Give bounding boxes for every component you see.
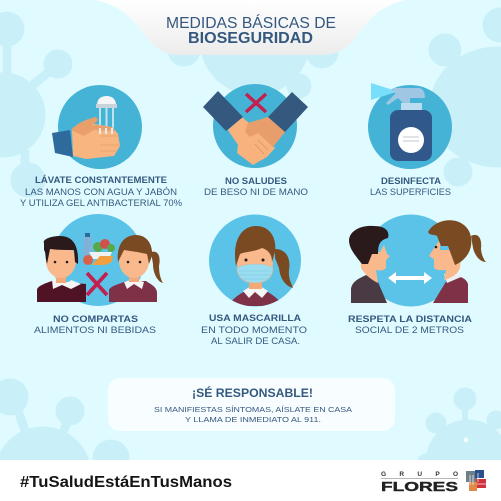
- panel: respeta la distancia: [348, 214, 486, 335]
- panel: usa mascarilla: [201, 214, 307, 346]
- arrow: double headed: [388, 272, 432, 284]
- icon: hand washing: [52, 85, 142, 169]
- title line 1: MEDIDAS BÁSICAS DE: [166, 13, 336, 32]
- text: lávate: [20, 174, 182, 208]
- man profile: [349, 226, 390, 303]
- text: lávate: LAS MANOS CON AGUA Y JABÓN: [25, 187, 177, 197]
- logo: grupo flores: GRUPO: [381, 471, 458, 478]
- icon: two people and food crossed: [37, 214, 163, 306]
- text: desinfecta: LAS SUPERFICIES: [370, 187, 451, 197]
- callout: sé responsable: [108, 378, 395, 431]
- logo: grupo flores: FLORES: [381, 479, 458, 494]
- woman profile: [428, 220, 486, 303]
- icon: handshake crossed: [203, 84, 308, 168]
- text: usa mascarilla: AL SALIR DE CASA.: [211, 336, 300, 346]
- text: no compartas: NO COMPARTAS: [53, 314, 138, 324]
- virus highlight dot: [464, 438, 468, 442]
- text: no saludes: DE BESO NI DE MANO: [204, 187, 308, 197]
- icon: woman with mask: [209, 214, 301, 306]
- callout heading: ¡SÉ RESPONSABLE!: [192, 385, 313, 400]
- callout text: SI MANIFIESTAS SÍNTOMAS, AÍSLATE EN CASA: [154, 405, 353, 414]
- panel: lávate las manos: [20, 85, 182, 208]
- text: no saludes: [204, 176, 308, 197]
- text: respeta: RESPETA LA DISTANCIA: [348, 314, 472, 324]
- text: no saludes: NO SALUDES: [225, 176, 287, 186]
- text: lávate: LÁVATE CONSTANTEMENTE: [35, 174, 167, 185]
- callout text: Y LLAMA DE INMEDIATO AL 911.: [185, 415, 321, 424]
- callout text: [154, 405, 353, 424]
- panel: no compartas: [34, 214, 163, 335]
- logo: grupo flores: [381, 470, 486, 494]
- hashtag: #TuSaludEstáEnTusManos: [20, 474, 232, 491]
- text: desinfecta: [370, 176, 451, 197]
- text: usa mascarilla: [201, 313, 307, 346]
- woman: [109, 235, 163, 302]
- man: [37, 236, 86, 302]
- text: desinfecta: DESINFECTA: [381, 176, 441, 186]
- title tab: [96, 0, 405, 55]
- text: usa mascarilla: USA MASCARILLA: [209, 313, 301, 323]
- text: no compartas: ALIMENTOS NI BEBIDAS: [34, 325, 156, 335]
- icon: two profiles with arrow: [349, 214, 486, 306]
- text: respeta: [348, 314, 472, 335]
- title line 2: BIOSEGURIDAD: [188, 30, 313, 47]
- cross: [87, 273, 107, 295]
- text: respeta: SOCIAL DE 2 METROS: [355, 325, 464, 335]
- footer band: [0, 460, 501, 501]
- panel: desinfecta: [368, 83, 452, 197]
- panel: no saludes: [203, 84, 308, 197]
- icon: spray bottle: [368, 83, 452, 169]
- title background: [96, 0, 405, 55]
- text: usa mascarilla: EN TODO MOMENTO: [201, 325, 307, 335]
- food and water bottle: [83, 233, 115, 265]
- icon: logo mark: [466, 470, 486, 491]
- text: lávate: Y UTILIZA GEL ANTIBACTERIAL 70%: [20, 198, 182, 208]
- text: no compartas: [34, 314, 156, 335]
